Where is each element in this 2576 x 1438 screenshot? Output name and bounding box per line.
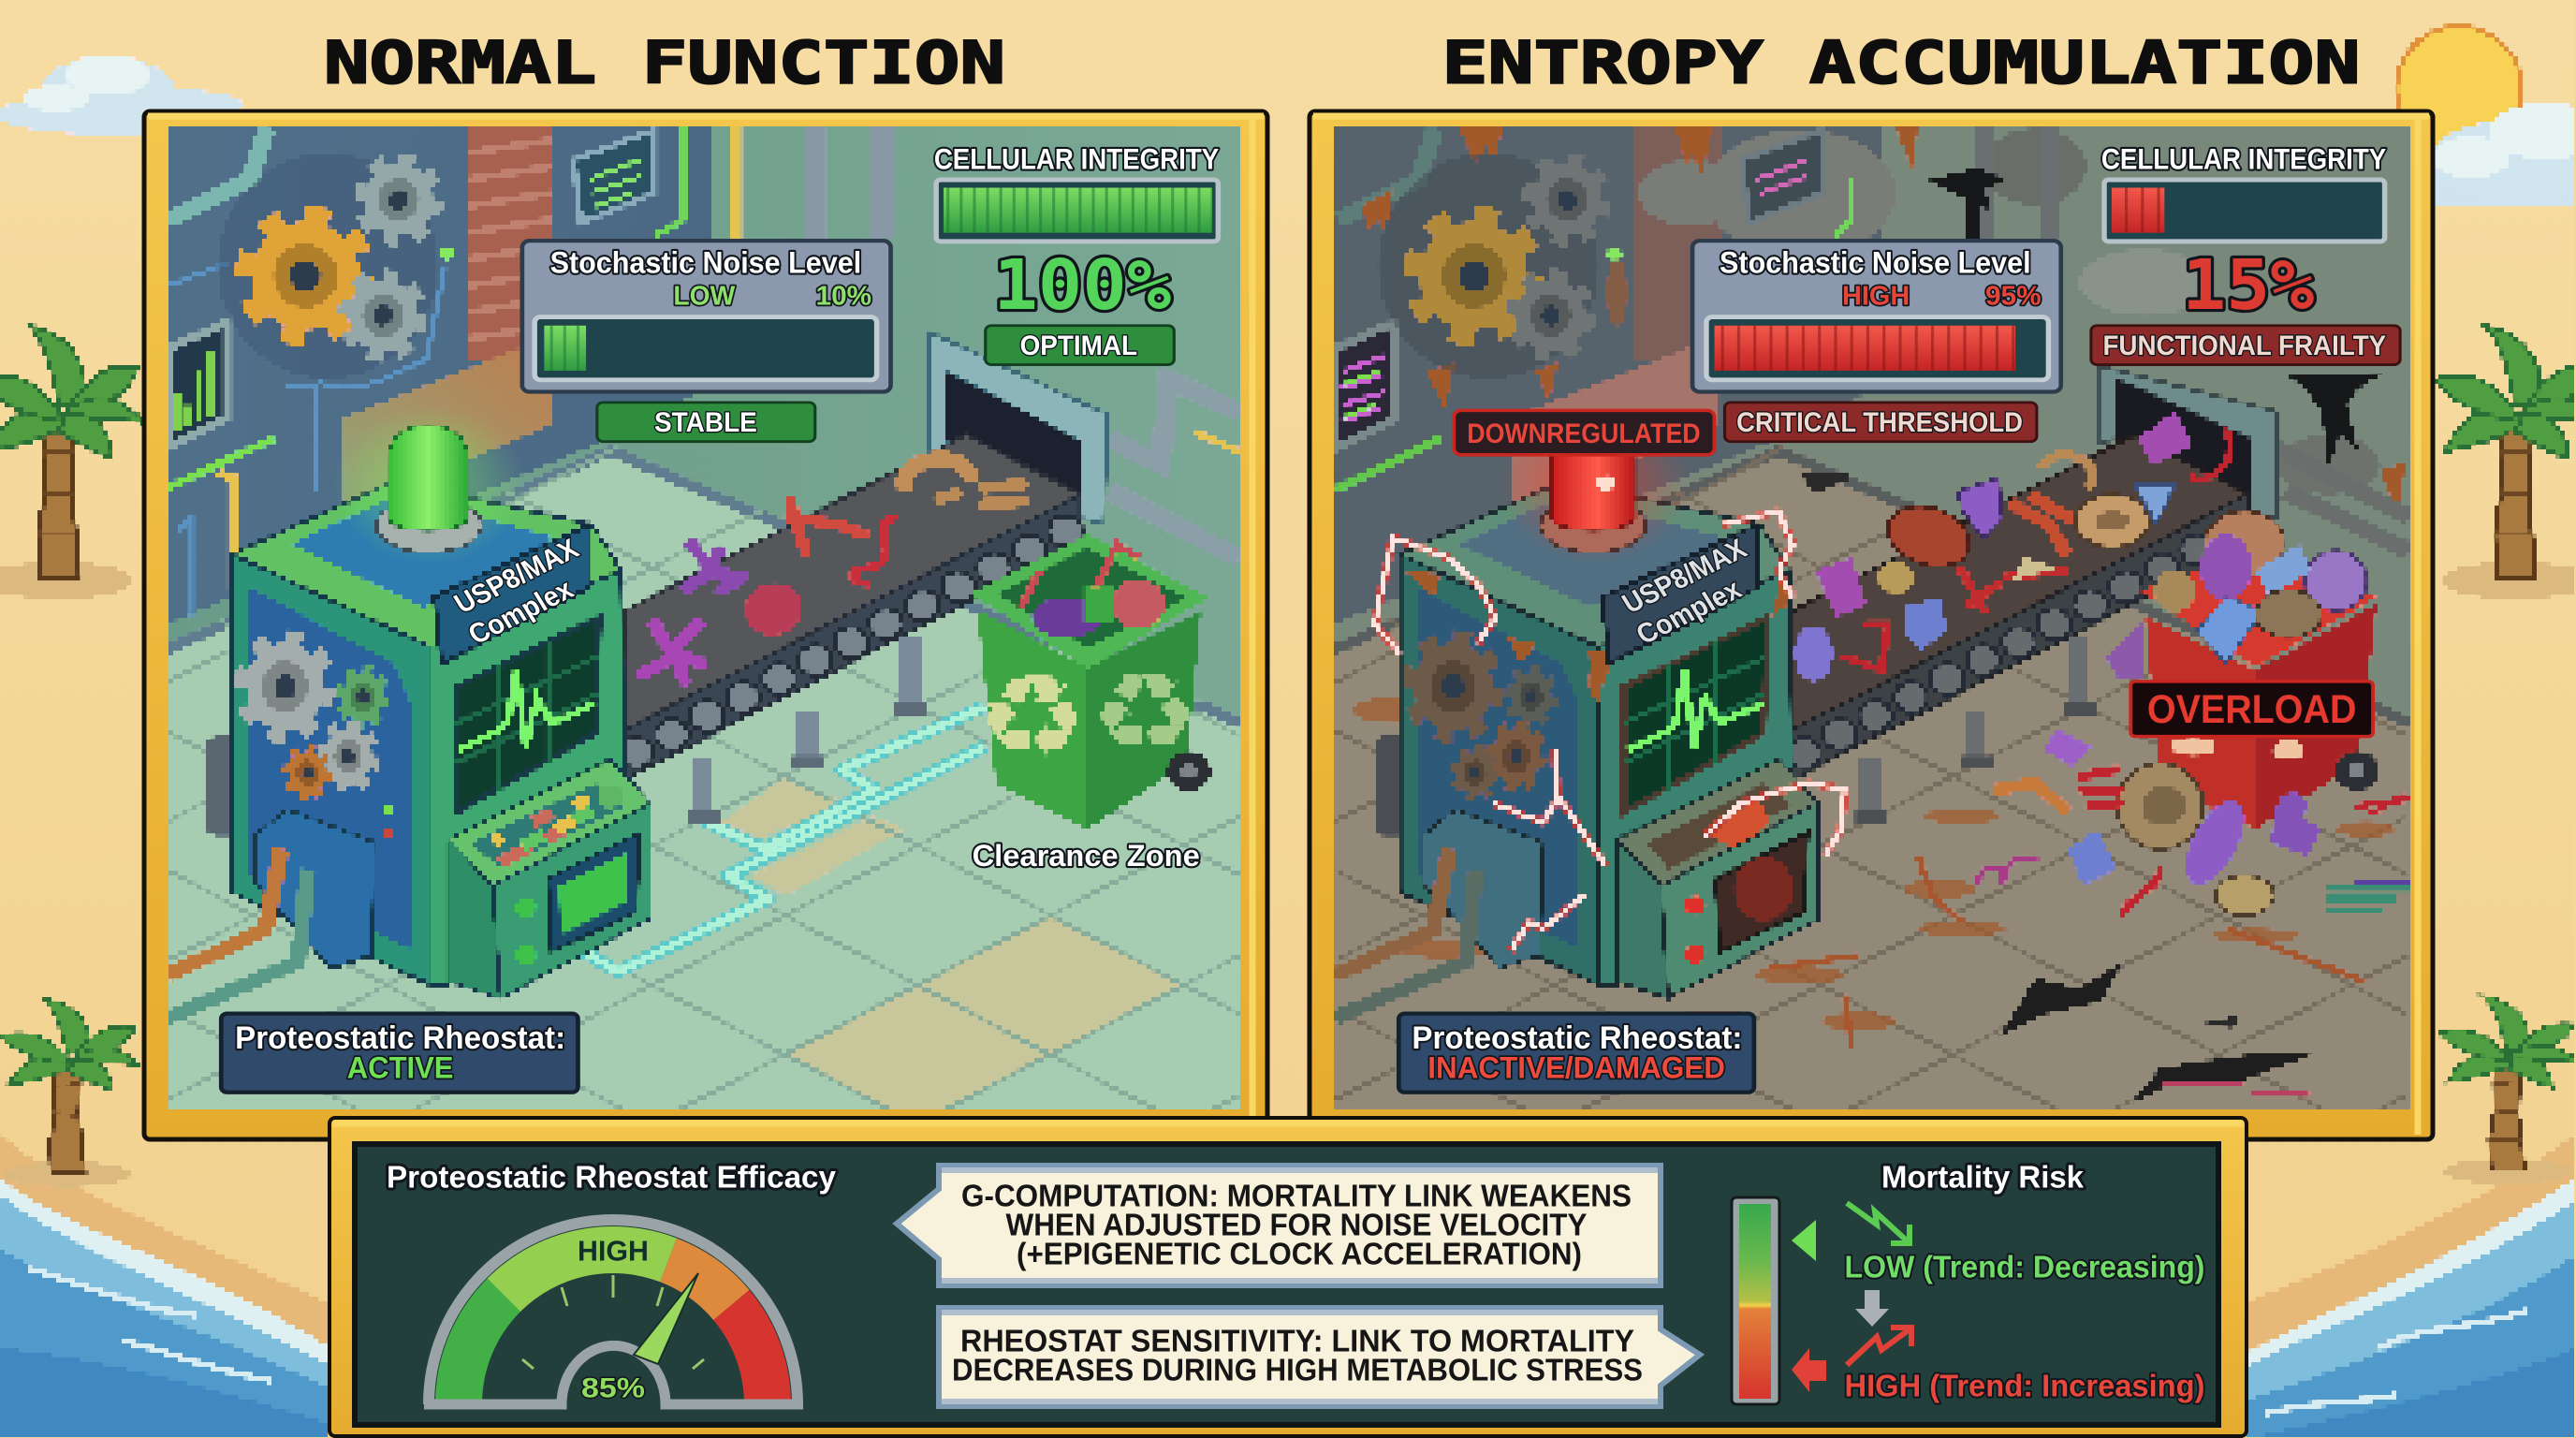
rheostat status: inactive [1398, 1014, 1754, 1093]
machine label text: Complex [1631, 573, 1748, 651]
cellular integrity meter: CELLULAR INTEGRITY [934, 142, 1219, 175]
panel: entropy accumulation scene [1335, 128, 2409, 1111]
callout: g-computation: G-COMPUTATION: MORTALITY LINK WEAKENS [961, 1178, 1632, 1213]
icon: increasing trend [1847, 1328, 1911, 1365]
panel: normal function frame [144, 111, 1267, 1139]
machine label text [448, 533, 584, 651]
noise level panel: high: HIGH [1842, 282, 1910, 311]
noise level panel: high: Stochastic Noise Level [1720, 246, 2031, 280]
callout: rheostat sensitivity: RHEOSTAT SENSITIVITY: LINK TO MORTALITY [960, 1324, 1634, 1357]
corroded wall gears [1412, 159, 1605, 357]
title: normal function: NORMAL FUNCTION [324, 28, 1005, 97]
cellular integrity meter [934, 142, 1219, 242]
palm tree: upper right [2436, 326, 2576, 599]
burned control console [1617, 759, 1819, 998]
control console [448, 759, 651, 998]
USP8/MAX machine [168, 405, 651, 1019]
heading: mortality risk: Mortality Risk [1881, 1159, 2085, 1195]
functional frailty pill [2091, 326, 2400, 365]
red alarm light [1500, 405, 1690, 565]
misfolded protein pile on belt [1794, 412, 2230, 682]
downregulated tag: DOWNREGULATED [1467, 418, 1701, 449]
arrow: low risk marker [1792, 1220, 1816, 1261]
factory wall [168, 126, 1240, 716]
callout: rheostat sensitivity: DECREASES DURING HIGH METABOLIC STRESS [952, 1352, 1643, 1387]
rheostat status: inactive: Proteostatic Rheostat: [1412, 1020, 1742, 1056]
stable pill: STABLE [654, 407, 757, 438]
optimal pill: OPTIMAL [1020, 330, 1137, 361]
rheostat status: inactive: INACTIVE/DAMAGED [1427, 1051, 1725, 1085]
recycling bin [972, 535, 1211, 829]
downregulated tag [1454, 410, 1715, 455]
machine label and status overlays: entropy [1398, 142, 2400, 1093]
spilled proteins on floor [1977, 730, 2409, 1094]
title: entropy accumulation: ENTROPY ACCUMULATION [1442, 28, 2361, 97]
clearance zone label: Clearance Zone [973, 840, 1200, 873]
conveyor belt [619, 435, 1082, 816]
cloud: top left [0, 54, 243, 135]
protein items on belt [643, 459, 1021, 680]
rheostat status: active: ACTIVE [347, 1051, 454, 1085]
machine label text: Complex [462, 573, 579, 651]
damaged label plate backing [1603, 524, 1758, 664]
high risk label: HIGH (Trend: Increasing) [1844, 1369, 2205, 1402]
noise level panel: 10% [816, 282, 871, 311]
machine label text [1617, 533, 1752, 651]
palm tree: lower right [2439, 996, 2576, 1184]
stable pill [597, 403, 815, 442]
arrow: low to high [1855, 1290, 1889, 1327]
cloud: top right [2429, 103, 2576, 204]
gauge: efficacy 85%: HIGH [578, 1234, 649, 1268]
heading: rheostat efficacy: Proteostatic Rheostat Efficacy [387, 1159, 837, 1195]
panel: entropy accumulation frame [1310, 111, 2433, 1139]
icon: decreasing trend [1847, 1203, 1910, 1243]
sun [2396, 26, 2522, 152]
conveyor belt: jammed [1787, 435, 2250, 816]
critical threshold pill [1725, 403, 2037, 442]
gauge: efficacy 85% [424, 1220, 803, 1404]
shoreline and ocean: left [0, 1133, 328, 1438]
cracked floor [1335, 128, 2409, 1111]
panel: normal function scene [168, 128, 1239, 1111]
palm tree: upper left [0, 326, 145, 599]
low risk label: LOW (Trend: Decreasing) [1844, 1249, 2205, 1284]
integrity value: 100% [993, 246, 1171, 326]
cellular integrity meter: low: CELLULAR INTEGRITY [2101, 142, 2386, 175]
noise level panel: high: 95% [1985, 282, 2042, 311]
cyan energy path [585, 707, 985, 972]
damaged factory wall [1335, 128, 2409, 791]
mortality risk bar [1732, 1197, 1779, 1404]
recycling bin: ♻ [976, 651, 1089, 783]
floor [168, 445, 1240, 1109]
arrow: high risk marker [1792, 1348, 1826, 1392]
optimal pill [986, 326, 1174, 365]
noise level panel: Stochastic Noise Level [550, 246, 861, 280]
overload sign: OVERLOAD [2147, 687, 2356, 731]
noise level panel: LOW [673, 282, 736, 311]
rheostat status: active: Proteostatic Rheostat: [235, 1020, 565, 1056]
machine label text: USP8/MAX [448, 533, 584, 620]
rheostat status: active [221, 1014, 578, 1093]
gauge: efficacy 85%: 85% [581, 1372, 645, 1404]
machine label and status overlays: normal [221, 142, 1219, 1093]
electric sparks [1374, 511, 1844, 952]
callout: g-computation: (+EPIGENETIC CLOCK ACCELERATION) [1017, 1236, 1582, 1271]
label plate backing [434, 524, 590, 664]
overflowing red bin [2105, 511, 2378, 829]
callout: g-computation [897, 1166, 1661, 1285]
cellular integrity meter: low [2101, 142, 2386, 242]
integrity value: 15%: 15% [2182, 246, 2315, 326]
machine label text: USP8/MAX [1617, 533, 1752, 620]
beacon light [333, 405, 524, 565]
panel: bottom dashboard [329, 1118, 2247, 1436]
overload sign [2130, 682, 2373, 737]
wall gears [244, 159, 437, 357]
critical threshold pill: CRITICAL THRESHOLD [1736, 407, 2023, 438]
broken gateway [2098, 365, 2409, 550]
palm tree: lower left [0, 999, 140, 1187]
callout: rheostat sensitivity [939, 1308, 1700, 1406]
noise level panel [522, 241, 891, 392]
noise level panel: high [1692, 241, 2061, 392]
callout: g-computation: WHEN ADJUSTED FOR NOISE VELOCITY [1005, 1208, 1588, 1241]
recycling bin: ♻ [1090, 650, 1199, 777]
damaged USP8/MAX machine [1335, 405, 1844, 1019]
wall pipes right and gateway [929, 332, 1239, 558]
functional frailty pill: FUNCTIONAL FRAILTY [2102, 330, 2386, 361]
shoreline and ocean: right [2248, 1133, 2576, 1438]
